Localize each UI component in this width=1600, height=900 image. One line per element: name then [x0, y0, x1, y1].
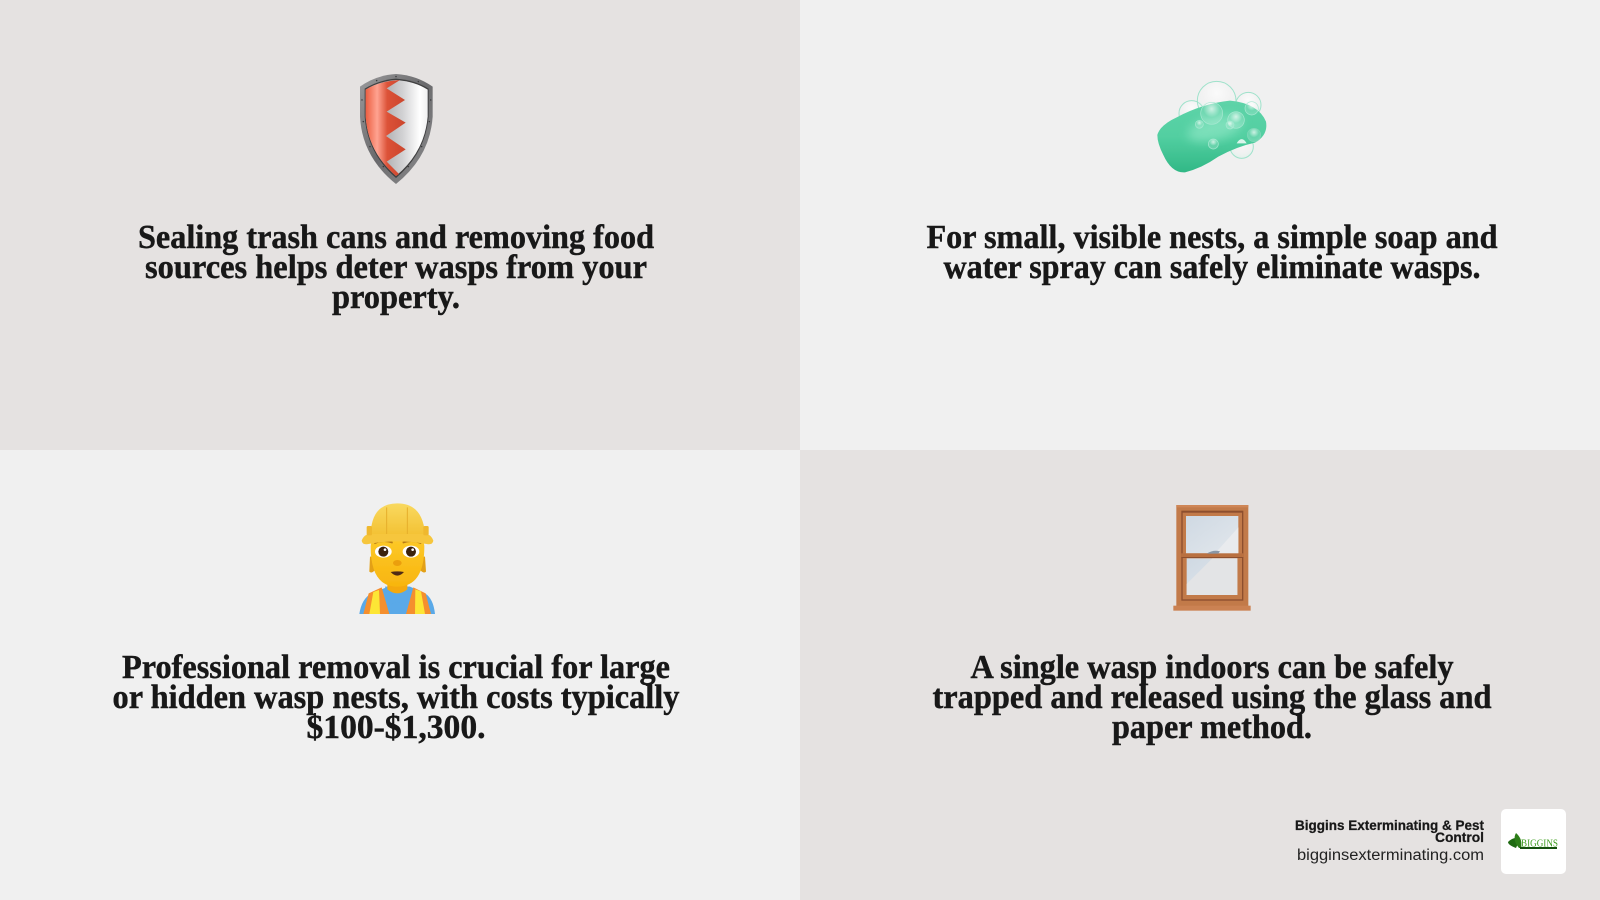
branding: company name and site: bigginsexterminating.com [1297, 847, 1484, 864]
text: professional tip: $100-$1,300. [306, 709, 486, 746]
logo card: BIGGINS [1521, 838, 1558, 850]
text: professional tip: Professional removal is crucial for large [122, 649, 670, 686]
panel: professional removal [0, 450, 800, 900]
text: soap tip: water spray can safely eliminate wasps. [944, 249, 1480, 286]
panel: sealing trash cans [0, 0, 800, 450]
text: professional tip [112, 649, 680, 746]
text: soap tip: For small, visible nests, a simple soap and [926, 219, 1498, 256]
text: soap tip [926, 219, 1498, 286]
logo card [1501, 809, 1566, 874]
panel: single wasp indoors [800, 450, 1600, 900]
panel: soap and water [800, 0, 1600, 450]
text: sealing tip [138, 219, 654, 316]
text: glass and paper tip [932, 649, 1492, 746]
text: professional tip: or hidden wasp nests, with costs typically [112, 679, 680, 716]
text: sealing tip: sources helps deter wasps from your [145, 249, 647, 286]
text: sealing tip: property. [332, 279, 460, 316]
text: glass and paper tip: A single wasp indoors can be safely [970, 649, 1454, 686]
text: glass and paper tip: trapped and released using the glass and [932, 679, 1492, 716]
branding: company name and site [1295, 817, 1484, 864]
icon: construction worker [359, 503, 435, 614]
branding: company name and site: Biggins Exterminating & Pest [1295, 817, 1484, 833]
icon: window [1173, 505, 1251, 611]
text: glass and paper tip: paper method. [1112, 709, 1312, 746]
icon: shield [360, 74, 433, 184]
icon: soap bar with bubbles [1157, 81, 1266, 172]
branding: company name and site: Control [1435, 829, 1484, 845]
text: sealing tip: Sealing trash cans and removing food [138, 219, 654, 256]
